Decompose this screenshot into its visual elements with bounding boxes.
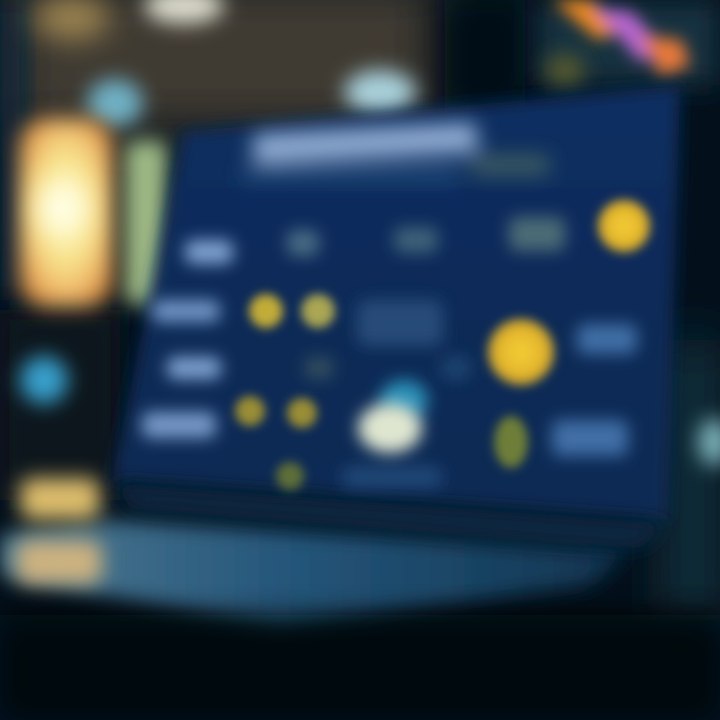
dark foreground vignette	[0, 615, 720, 720]
row labels	[142, 240, 233, 438]
panel title	[240, 122, 550, 180]
stacked warm lights	[16, 478, 102, 584]
glowing lamp	[18, 118, 168, 308]
background lights	[34, 0, 720, 466]
large yellow circles	[487, 199, 651, 386]
yellow status dots	[235, 294, 528, 490]
cloud icon	[358, 380, 428, 453]
colored stripe, top right	[552, 0, 690, 76]
laptop base	[0, 520, 630, 628]
column labels	[287, 217, 637, 487]
light blue orb	[20, 356, 68, 404]
dashboard panel	[112, 86, 680, 548]
